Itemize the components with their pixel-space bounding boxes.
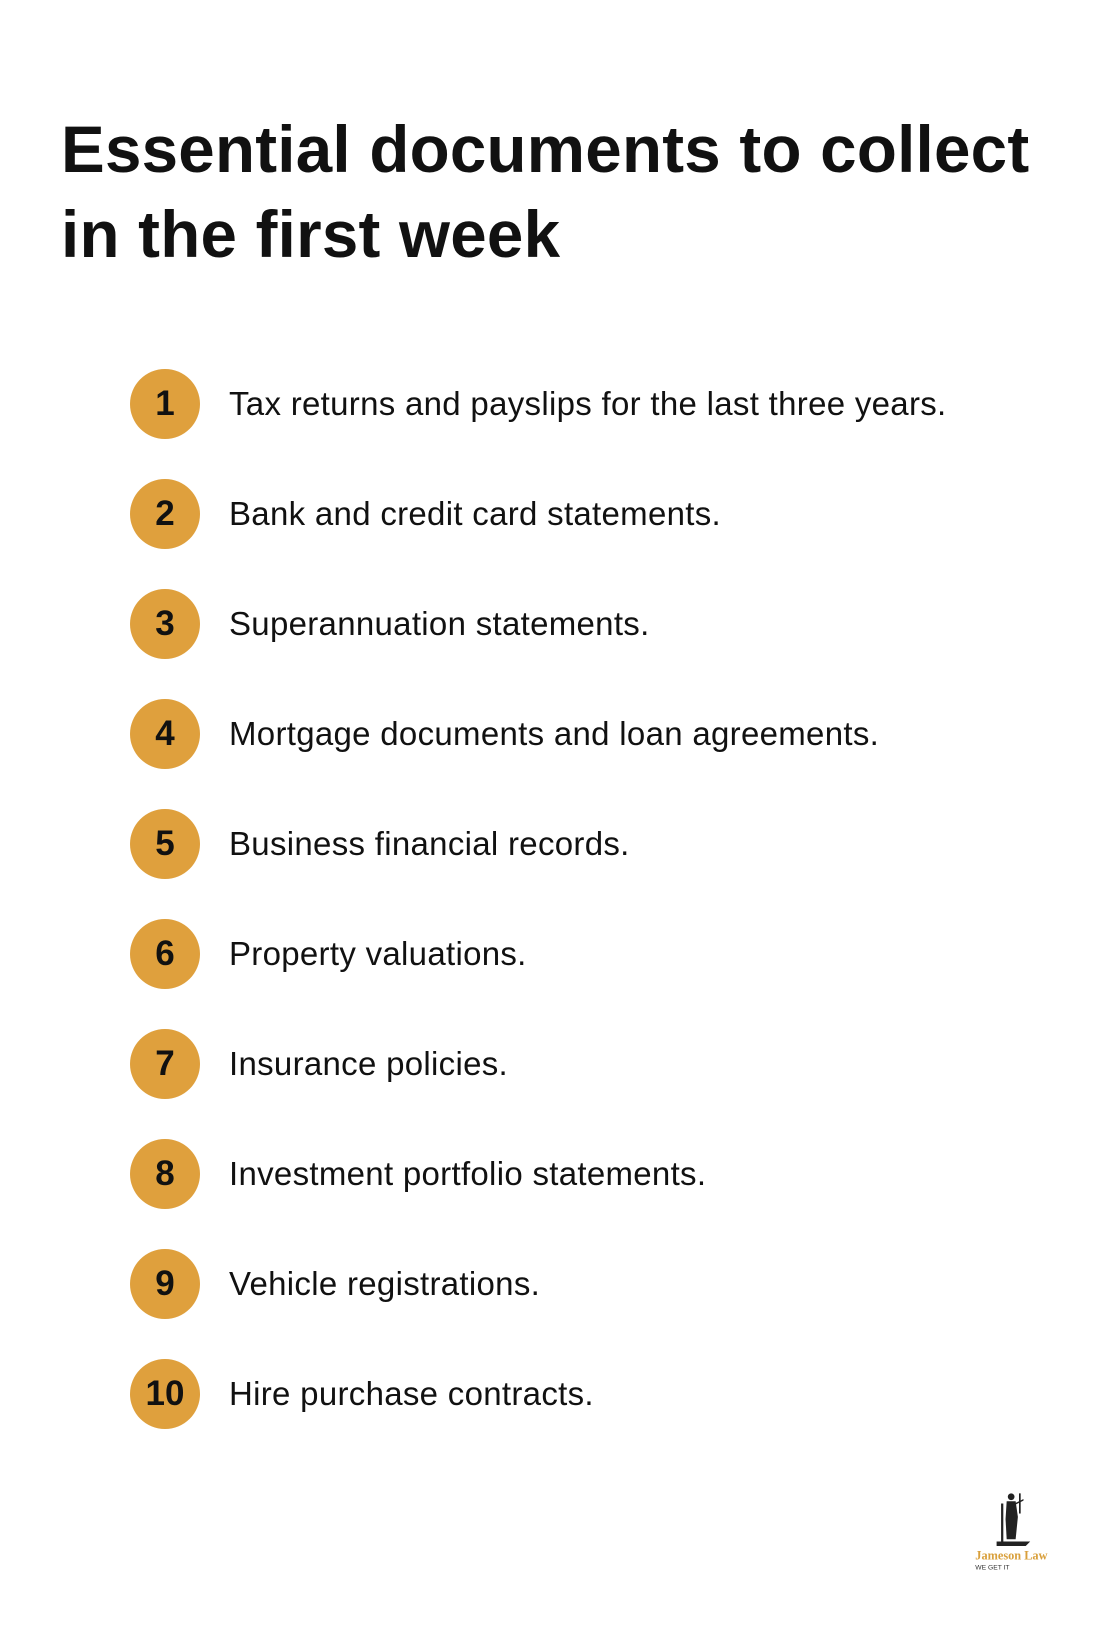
icon: lady justice [997, 1493, 1030, 1546]
list item 10: 10 [146, 1374, 184, 1413]
list item 1 [130, 369, 947, 439]
list item 8 [130, 1139, 706, 1209]
list item 1: Tax returns and payslips for the last three years. [229, 385, 947, 422]
logo: Jameson Law: WE GET IT [975, 1565, 1010, 1572]
list item 9 [130, 1249, 540, 1319]
list item 2: 2 [155, 494, 175, 533]
list item 2: Bank and credit card statements. [229, 495, 721, 532]
list item 2 [130, 479, 721, 549]
list item 3: 3 [155, 604, 175, 643]
list item 9: Vehicle registrations. [229, 1265, 540, 1302]
list item 4: 4 [155, 714, 175, 753]
list item 10: Hire purchase contracts. [229, 1375, 594, 1412]
logo: Jameson Law: Jameson Law [975, 1548, 1048, 1562]
list item 5 [130, 809, 630, 879]
list item 7: 7 [155, 1044, 175, 1083]
list item 5: 5 [155, 824, 175, 863]
list item 10 [130, 1359, 594, 1429]
list item 9: 9 [155, 1264, 175, 1303]
list item 8: Investment portfolio statements. [229, 1155, 706, 1192]
title: Essential documents to collect [61, 113, 1029, 186]
logo: Jameson Law [975, 1493, 1048, 1572]
list item 4 [130, 699, 879, 769]
list item 5: Business financial records. [229, 825, 630, 862]
list item 6: 6 [155, 934, 175, 973]
list item 8: 8 [155, 1154, 175, 1193]
list item 3 [130, 589, 650, 659]
list item 4: Mortgage documents and loan agreements. [229, 715, 879, 752]
list item 7: Insurance policies. [229, 1045, 508, 1082]
title: in the first week [61, 198, 560, 271]
list item 3: Superannuation statements. [229, 605, 650, 642]
title [61, 113, 1029, 271]
list item 6: Property valuations. [229, 935, 527, 972]
list item 6 [130, 919, 527, 989]
list item 7 [130, 1029, 508, 1099]
list item 1: 1 [155, 384, 175, 423]
